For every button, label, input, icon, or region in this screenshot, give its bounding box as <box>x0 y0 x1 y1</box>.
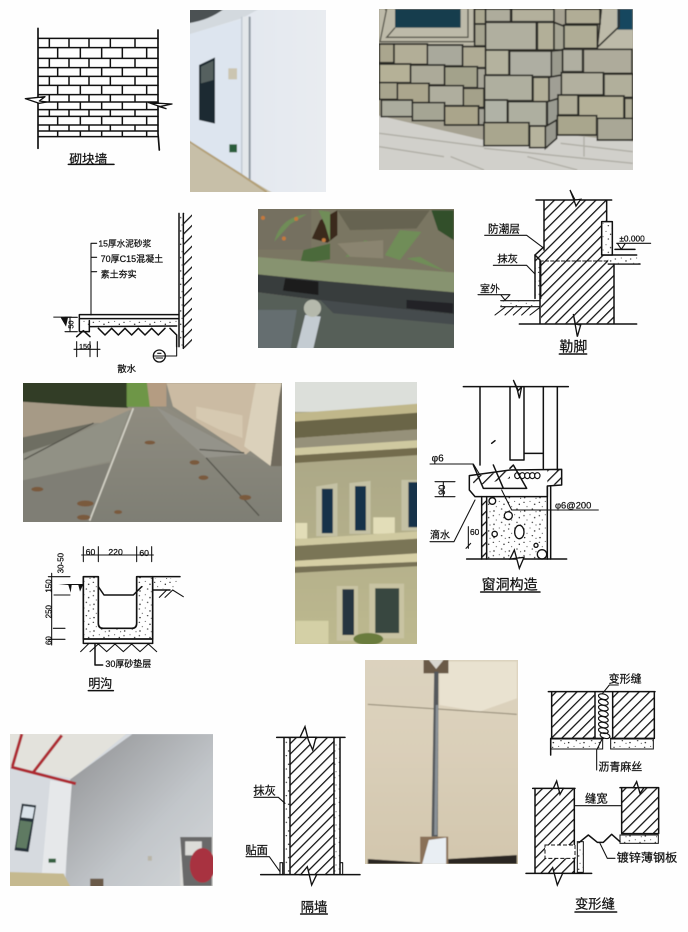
grade height dimension <box>65 317 77 332</box>
curb top <box>255 257 457 293</box>
bright patch <box>440 662 517 712</box>
switch <box>148 856 152 861</box>
left wall <box>187 19 242 190</box>
cornice <box>292 404 420 422</box>
red sprinkler pipes <box>11 734 76 784</box>
channel fill <box>83 577 153 639</box>
brick courses <box>38 38 158 137</box>
retaining wall <box>20 402 133 438</box>
pavement <box>376 115 636 172</box>
sand bed <box>83 639 153 643</box>
joint leader <box>603 685 618 693</box>
plaster label: 抹灰 <box>497 253 518 266</box>
top break right <box>633 782 644 793</box>
compacted soil <box>77 328 177 347</box>
damp label: 防潮层 <box>488 223 520 236</box>
hatched wall <box>183 213 192 348</box>
dim text: 60 <box>470 527 480 537</box>
wall plaster <box>179 213 183 348</box>
lower wall right <box>622 788 658 834</box>
caption: 隔墙 <box>301 899 327 914</box>
wall lamp <box>228 68 237 79</box>
photo: interior wall <box>10 734 213 886</box>
hatched wall <box>290 737 334 875</box>
caption underline <box>481 590 540 594</box>
top dimensions <box>82 547 153 562</box>
dim 250: 250 <box>45 604 54 618</box>
sand label leader <box>95 644 103 665</box>
bottom break <box>301 867 317 885</box>
upper windows <box>322 482 418 533</box>
wall body <box>482 487 551 559</box>
caption underline <box>559 352 587 356</box>
upper windows surrounds <box>316 480 420 536</box>
main wall <box>65 734 215 889</box>
caption underline <box>88 688 113 693</box>
floor <box>8 872 72 889</box>
dashed block <box>545 845 575 858</box>
lintel outline <box>469 469 562 497</box>
sunlit wall patches <box>295 517 395 539</box>
dim 220: 220 <box>108 547 123 557</box>
stirrup leader <box>502 490 598 510</box>
hose cabinet <box>180 837 215 889</box>
paving joints <box>379 133 633 170</box>
exit sign <box>48 859 56 863</box>
plaster leader <box>254 797 285 803</box>
top break <box>300 727 316 750</box>
column stones <box>484 9 565 148</box>
mark <box>492 441 495 443</box>
upper wall right <box>613 692 654 738</box>
concrete slab <box>79 315 178 332</box>
right ground fill <box>154 578 177 589</box>
outdoor label: 室外 <box>480 283 500 296</box>
dim 60: 60 <box>86 547 95 557</box>
caption: 明沟 <box>88 677 112 691</box>
window <box>199 57 215 124</box>
break mark <box>513 380 522 398</box>
gap of greenery <box>127 380 153 407</box>
lower windows <box>342 589 354 635</box>
layer leader <box>91 243 97 315</box>
gap dimension <box>575 804 622 807</box>
interior plaster <box>603 223 611 254</box>
hedge <box>20 380 128 408</box>
wall pillar <box>244 383 282 466</box>
grade mark <box>53 317 72 327</box>
dim 30-50: 30-50 <box>56 552 65 573</box>
caption: 窗洞构造 <box>482 576 538 592</box>
outdoor level <box>478 295 540 307</box>
gap label: 缝宽 <box>585 791 608 805</box>
right wall stones <box>557 9 633 140</box>
drip label: 滴水 <box>430 528 450 541</box>
galvanized plate <box>579 834 620 842</box>
lower window 2 <box>375 588 399 633</box>
plaster label: 抹灰 <box>253 784 276 798</box>
orange reflections <box>261 216 326 269</box>
ceiling <box>187 7 263 35</box>
outdoor slab <box>501 301 539 306</box>
main pavement <box>89 407 285 525</box>
facing leader <box>246 857 280 872</box>
lower plaster <box>620 835 658 843</box>
photo: stone plinth wall <box>379 9 633 170</box>
drawing: plinth section <box>478 190 651 354</box>
stone wall <box>166 383 256 454</box>
layer label 3: 素土夯实 <box>101 268 137 279</box>
lintel hatch end <box>547 470 561 485</box>
debris <box>90 879 104 887</box>
caption: 勒脚 <box>559 338 587 354</box>
window jamb lines <box>463 387 568 470</box>
strip highlight <box>434 705 438 835</box>
rebar leader <box>430 464 480 475</box>
exit sign <box>229 144 237 152</box>
level text: ±0.000 <box>619 233 645 243</box>
plaster strips <box>482 497 486 559</box>
filler label: 沥青麻丝 <box>598 759 642 773</box>
side plaster <box>577 842 583 872</box>
rebar circles <box>515 473 540 479</box>
caption underline <box>575 910 617 914</box>
joint strip <box>432 672 438 837</box>
skirting <box>280 863 343 875</box>
left hazy wall <box>255 206 311 249</box>
caption underline <box>301 912 327 916</box>
drawing: window opening <box>430 380 598 592</box>
facing label: 贴面 <box>245 843 268 857</box>
lower outline <box>526 788 659 873</box>
joint label: 变形缝 <box>609 671 642 685</box>
caption: 散水 <box>117 363 137 374</box>
plaster strip <box>535 255 541 298</box>
wall outline <box>261 737 360 875</box>
plaster left <box>551 739 603 749</box>
wall edges <box>38 28 159 150</box>
lintel height dimension <box>435 482 455 497</box>
water <box>255 292 457 351</box>
soil hatch <box>495 307 540 315</box>
hose reel <box>190 848 215 883</box>
damp course <box>540 259 615 263</box>
lower windows surrounds <box>337 584 404 641</box>
drain pipe <box>296 315 321 351</box>
photo: stone steps <box>23 383 282 522</box>
cabinet label <box>185 841 202 855</box>
bottom white patch <box>422 838 446 864</box>
interior floor <box>602 249 640 264</box>
bottom break <box>548 868 563 885</box>
middle band <box>292 531 420 546</box>
drawing: expansion joint sections <box>526 671 677 912</box>
section symbol <box>153 347 177 362</box>
layer label 2: 70厚C15混凝土 <box>101 253 163 264</box>
left wall stones <box>379 9 486 125</box>
ceiling <box>8 731 130 779</box>
plate label: 镀锌薄钢板 <box>617 851 677 865</box>
channel outline <box>83 577 153 639</box>
drawing: open ditch section <box>45 547 183 691</box>
downpipe <box>241 17 243 185</box>
bed hatch <box>81 644 157 652</box>
break marks <box>570 190 581 337</box>
faint joint line <box>368 704 517 714</box>
plate leader <box>600 843 615 858</box>
photo: drainage gutter <box>258 209 454 348</box>
plaster right <box>611 739 653 749</box>
bottom bracket <box>420 837 448 864</box>
caption underline <box>68 162 114 167</box>
right ground <box>153 577 180 590</box>
top bracket <box>424 660 448 673</box>
tree trunk <box>312 210 337 243</box>
level mark <box>617 243 651 249</box>
dim text: 90 <box>437 485 447 495</box>
curb face <box>255 274 457 315</box>
dim text: 50 <box>66 321 75 329</box>
window <box>14 804 36 852</box>
photo: building facade <box>295 382 417 644</box>
plaster right <box>335 737 339 875</box>
bottom line <box>467 557 567 561</box>
caption: 变形缝 <box>575 896 615 911</box>
wall outline <box>519 200 637 324</box>
left dimension lines <box>48 573 70 645</box>
fallen leaves <box>31 441 251 520</box>
lower sunlit patch <box>295 621 328 644</box>
window frames <box>379 9 475 45</box>
water line <box>98 587 142 595</box>
dim 60 right: 60 <box>139 548 149 558</box>
sand label: 30厚砂垫层 <box>105 658 151 669</box>
upper wall outline <box>548 692 655 755</box>
dim 150: 150 <box>45 579 54 593</box>
lintel hatch start <box>470 471 510 486</box>
drawing: partition wall <box>245 727 360 914</box>
stirrup label: φ6@200 <box>555 501 591 511</box>
caption: 砌块墙 <box>69 152 108 166</box>
damp leader <box>485 235 544 248</box>
break marks <box>25 97 172 109</box>
column <box>42 780 72 874</box>
dimension text: 150 <box>79 342 91 351</box>
drawing: masonry wall <box>25 28 172 166</box>
layer labels: 15厚水泥砂浆 <box>98 238 152 249</box>
drawing: apron section <box>53 213 192 374</box>
upper wall left <box>552 692 594 738</box>
bottom dimension <box>74 342 100 357</box>
dim 60 left: 60 <box>45 636 54 645</box>
concrete fill <box>487 497 547 559</box>
foliage <box>274 210 446 272</box>
rebar label: φ6 <box>432 454 444 465</box>
drip leader <box>430 500 475 542</box>
photo: wall with downpipe <box>190 10 326 192</box>
upper steps <box>20 423 94 454</box>
hatched wall <box>535 200 614 323</box>
lower step <box>20 463 110 525</box>
lower wall left <box>535 788 574 873</box>
sky <box>292 379 420 412</box>
pipe mouth <box>304 300 321 317</box>
step edges <box>90 408 133 521</box>
plaster left <box>284 737 290 875</box>
filler leader <box>597 740 602 770</box>
width dimension <box>466 527 471 548</box>
bottom break <box>510 550 524 568</box>
baseboard <box>368 855 517 864</box>
joint filler coil <box>598 693 611 740</box>
photo: expansion joint <box>365 660 518 864</box>
top break left <box>553 781 563 794</box>
shrub <box>353 633 383 645</box>
plaster leader <box>493 265 535 274</box>
grade mark left <box>58 584 83 593</box>
right soil <box>159 590 183 597</box>
floor <box>187 142 277 195</box>
stirrup <box>473 465 527 488</box>
aggregate stones <box>489 498 547 559</box>
